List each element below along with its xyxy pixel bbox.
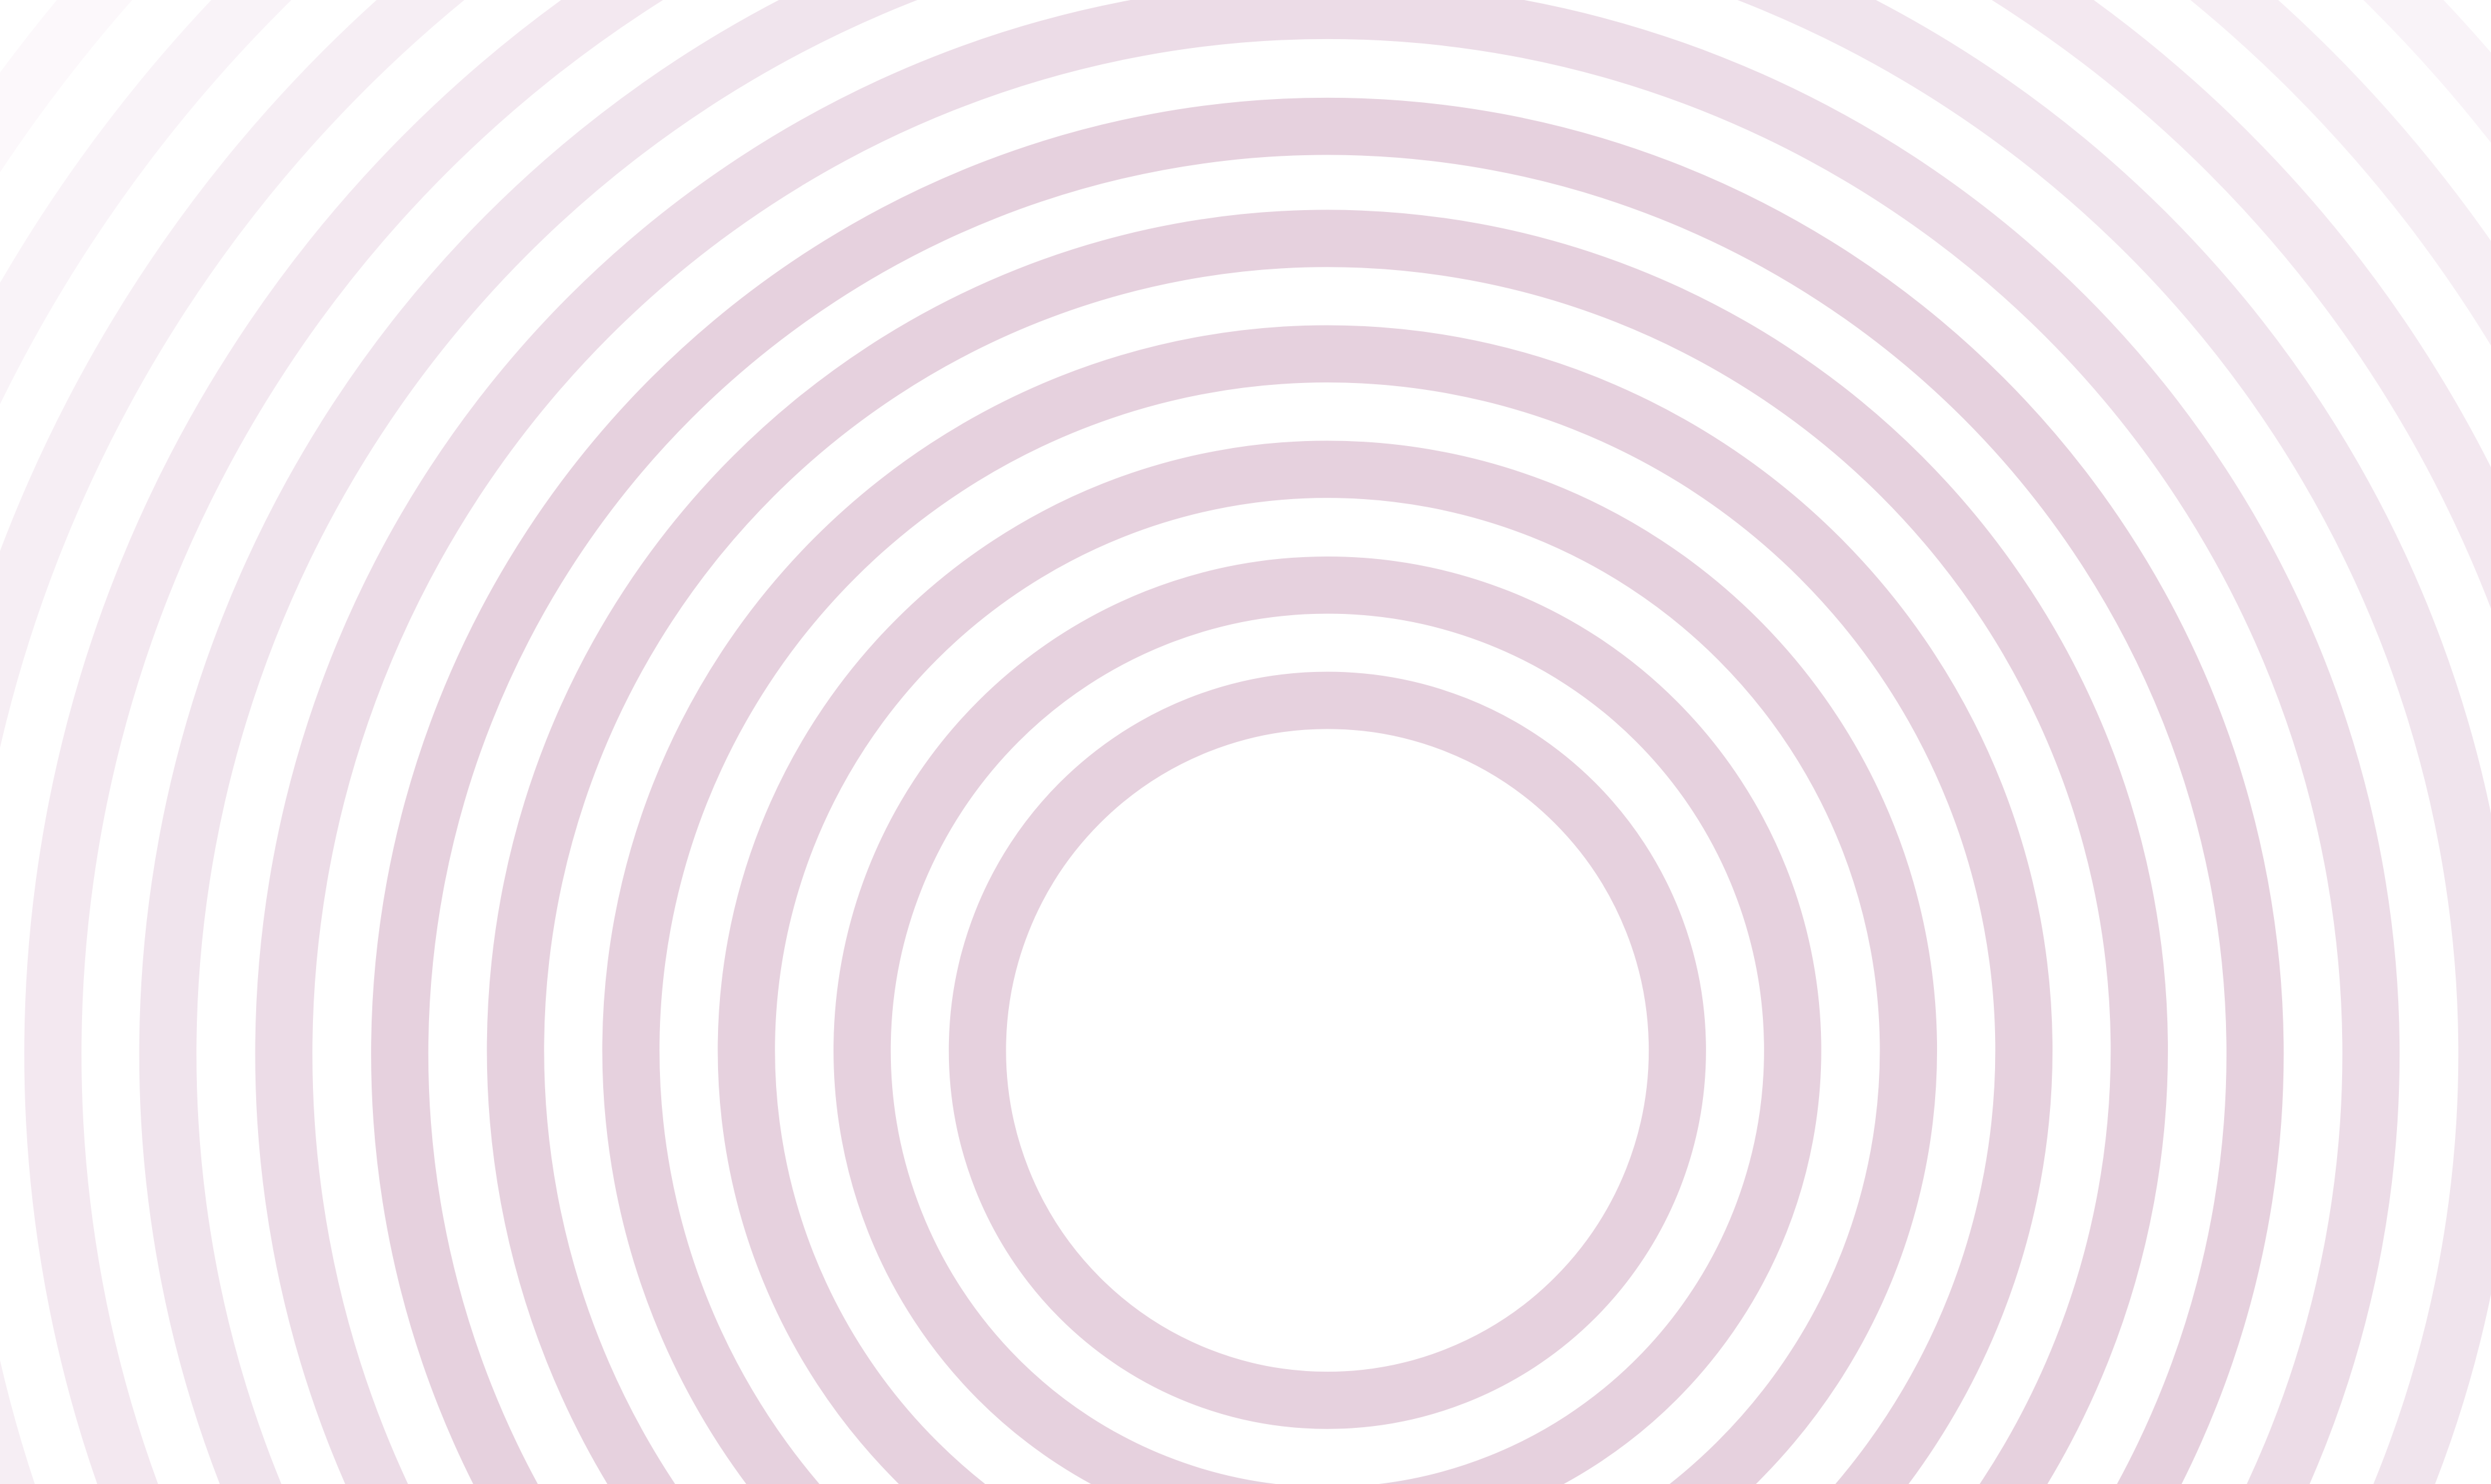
ring 3: [746, 469, 1909, 1484]
ring 2: [862, 585, 1793, 1484]
ring 4: [631, 354, 2024, 1484]
ring 5: [515, 238, 2140, 1484]
ring 6: [400, 126, 2255, 1484]
ring 1 (innermost): [977, 700, 1677, 1400]
